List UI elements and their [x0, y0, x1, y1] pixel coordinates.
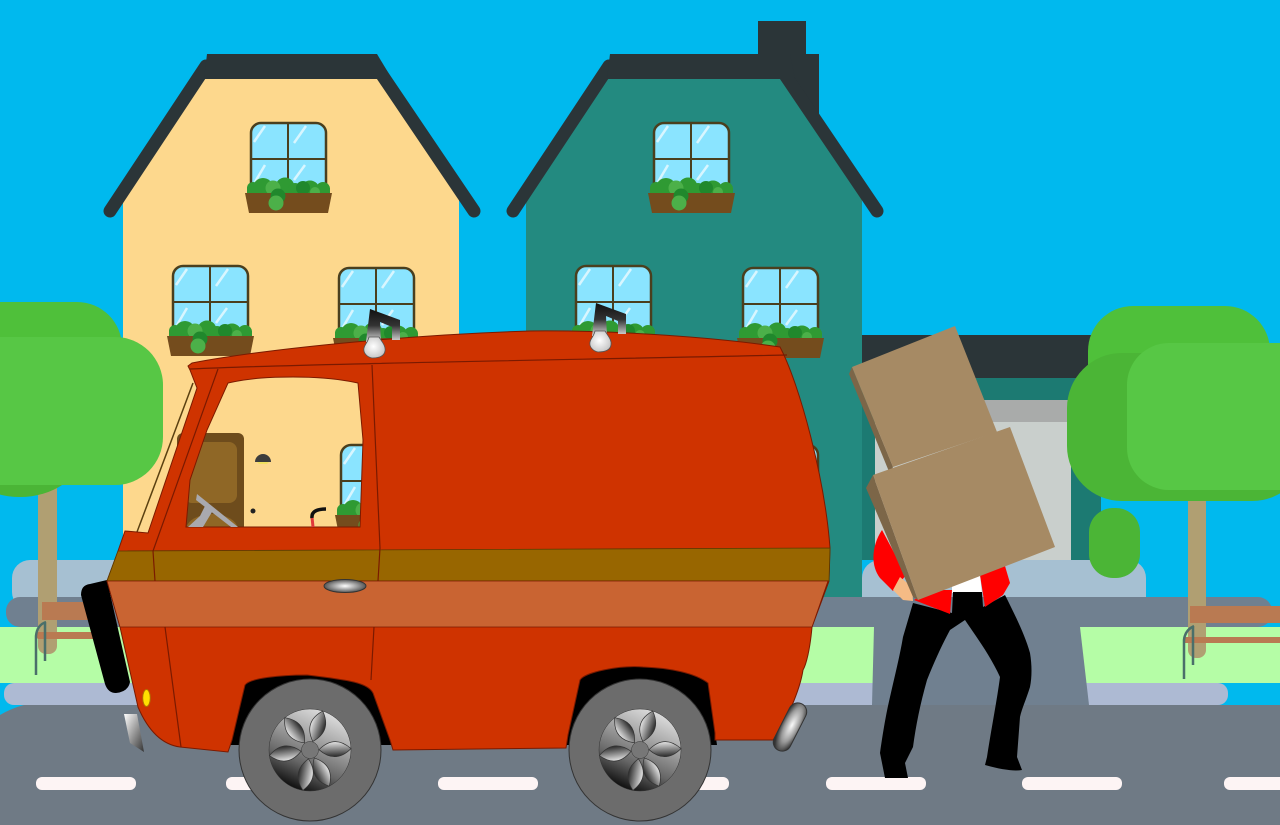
house: teal with chimney — [513, 21, 877, 600]
man carrying boxes — [849, 326, 1055, 778]
rear wheel — [569, 679, 711, 821]
windshield line — [137, 383, 193, 532]
shirt sleeve — [873, 530, 906, 591]
black rear bumper — [81, 580, 130, 693]
paved path — [6, 597, 1272, 627]
steering wheel — [188, 494, 238, 527]
road dashes — [36, 777, 1280, 790]
house: yellow — [110, 54, 474, 600]
tree: right — [1067, 306, 1280, 658]
lower box — [866, 475, 918, 600]
van body — [107, 331, 830, 752]
front chrome corner — [124, 714, 144, 752]
orange stripe — [107, 581, 828, 627]
van — [81, 303, 830, 821]
bench: left — [36, 602, 97, 675]
shirt hem right — [980, 566, 1010, 607]
walkway to building — [872, 627, 1089, 705]
door handle — [324, 580, 366, 592]
white undershirt — [952, 575, 982, 593]
grass strips — [0, 627, 1280, 683]
hand — [893, 577, 913, 601]
trousers — [880, 592, 1032, 778]
shirt hem left — [914, 590, 952, 614]
sidewalk — [4, 683, 1228, 705]
panel lines — [153, 355, 787, 747]
yellow light — [143, 690, 150, 706]
upper box — [849, 367, 893, 474]
gear lever — [312, 517, 313, 527]
bench: right — [1184, 606, 1280, 679]
road — [0, 705, 1280, 825]
tree: left — [0, 302, 163, 654]
note-shaped roof fitting left — [364, 309, 400, 358]
rear chrome bumper — [770, 700, 810, 754]
note-shaped roof fitting right — [590, 303, 626, 352]
background building — [12, 335, 1146, 620]
front wheel — [239, 679, 381, 821]
brown stripe — [107, 548, 830, 581]
wheel arches — [230, 667, 717, 745]
